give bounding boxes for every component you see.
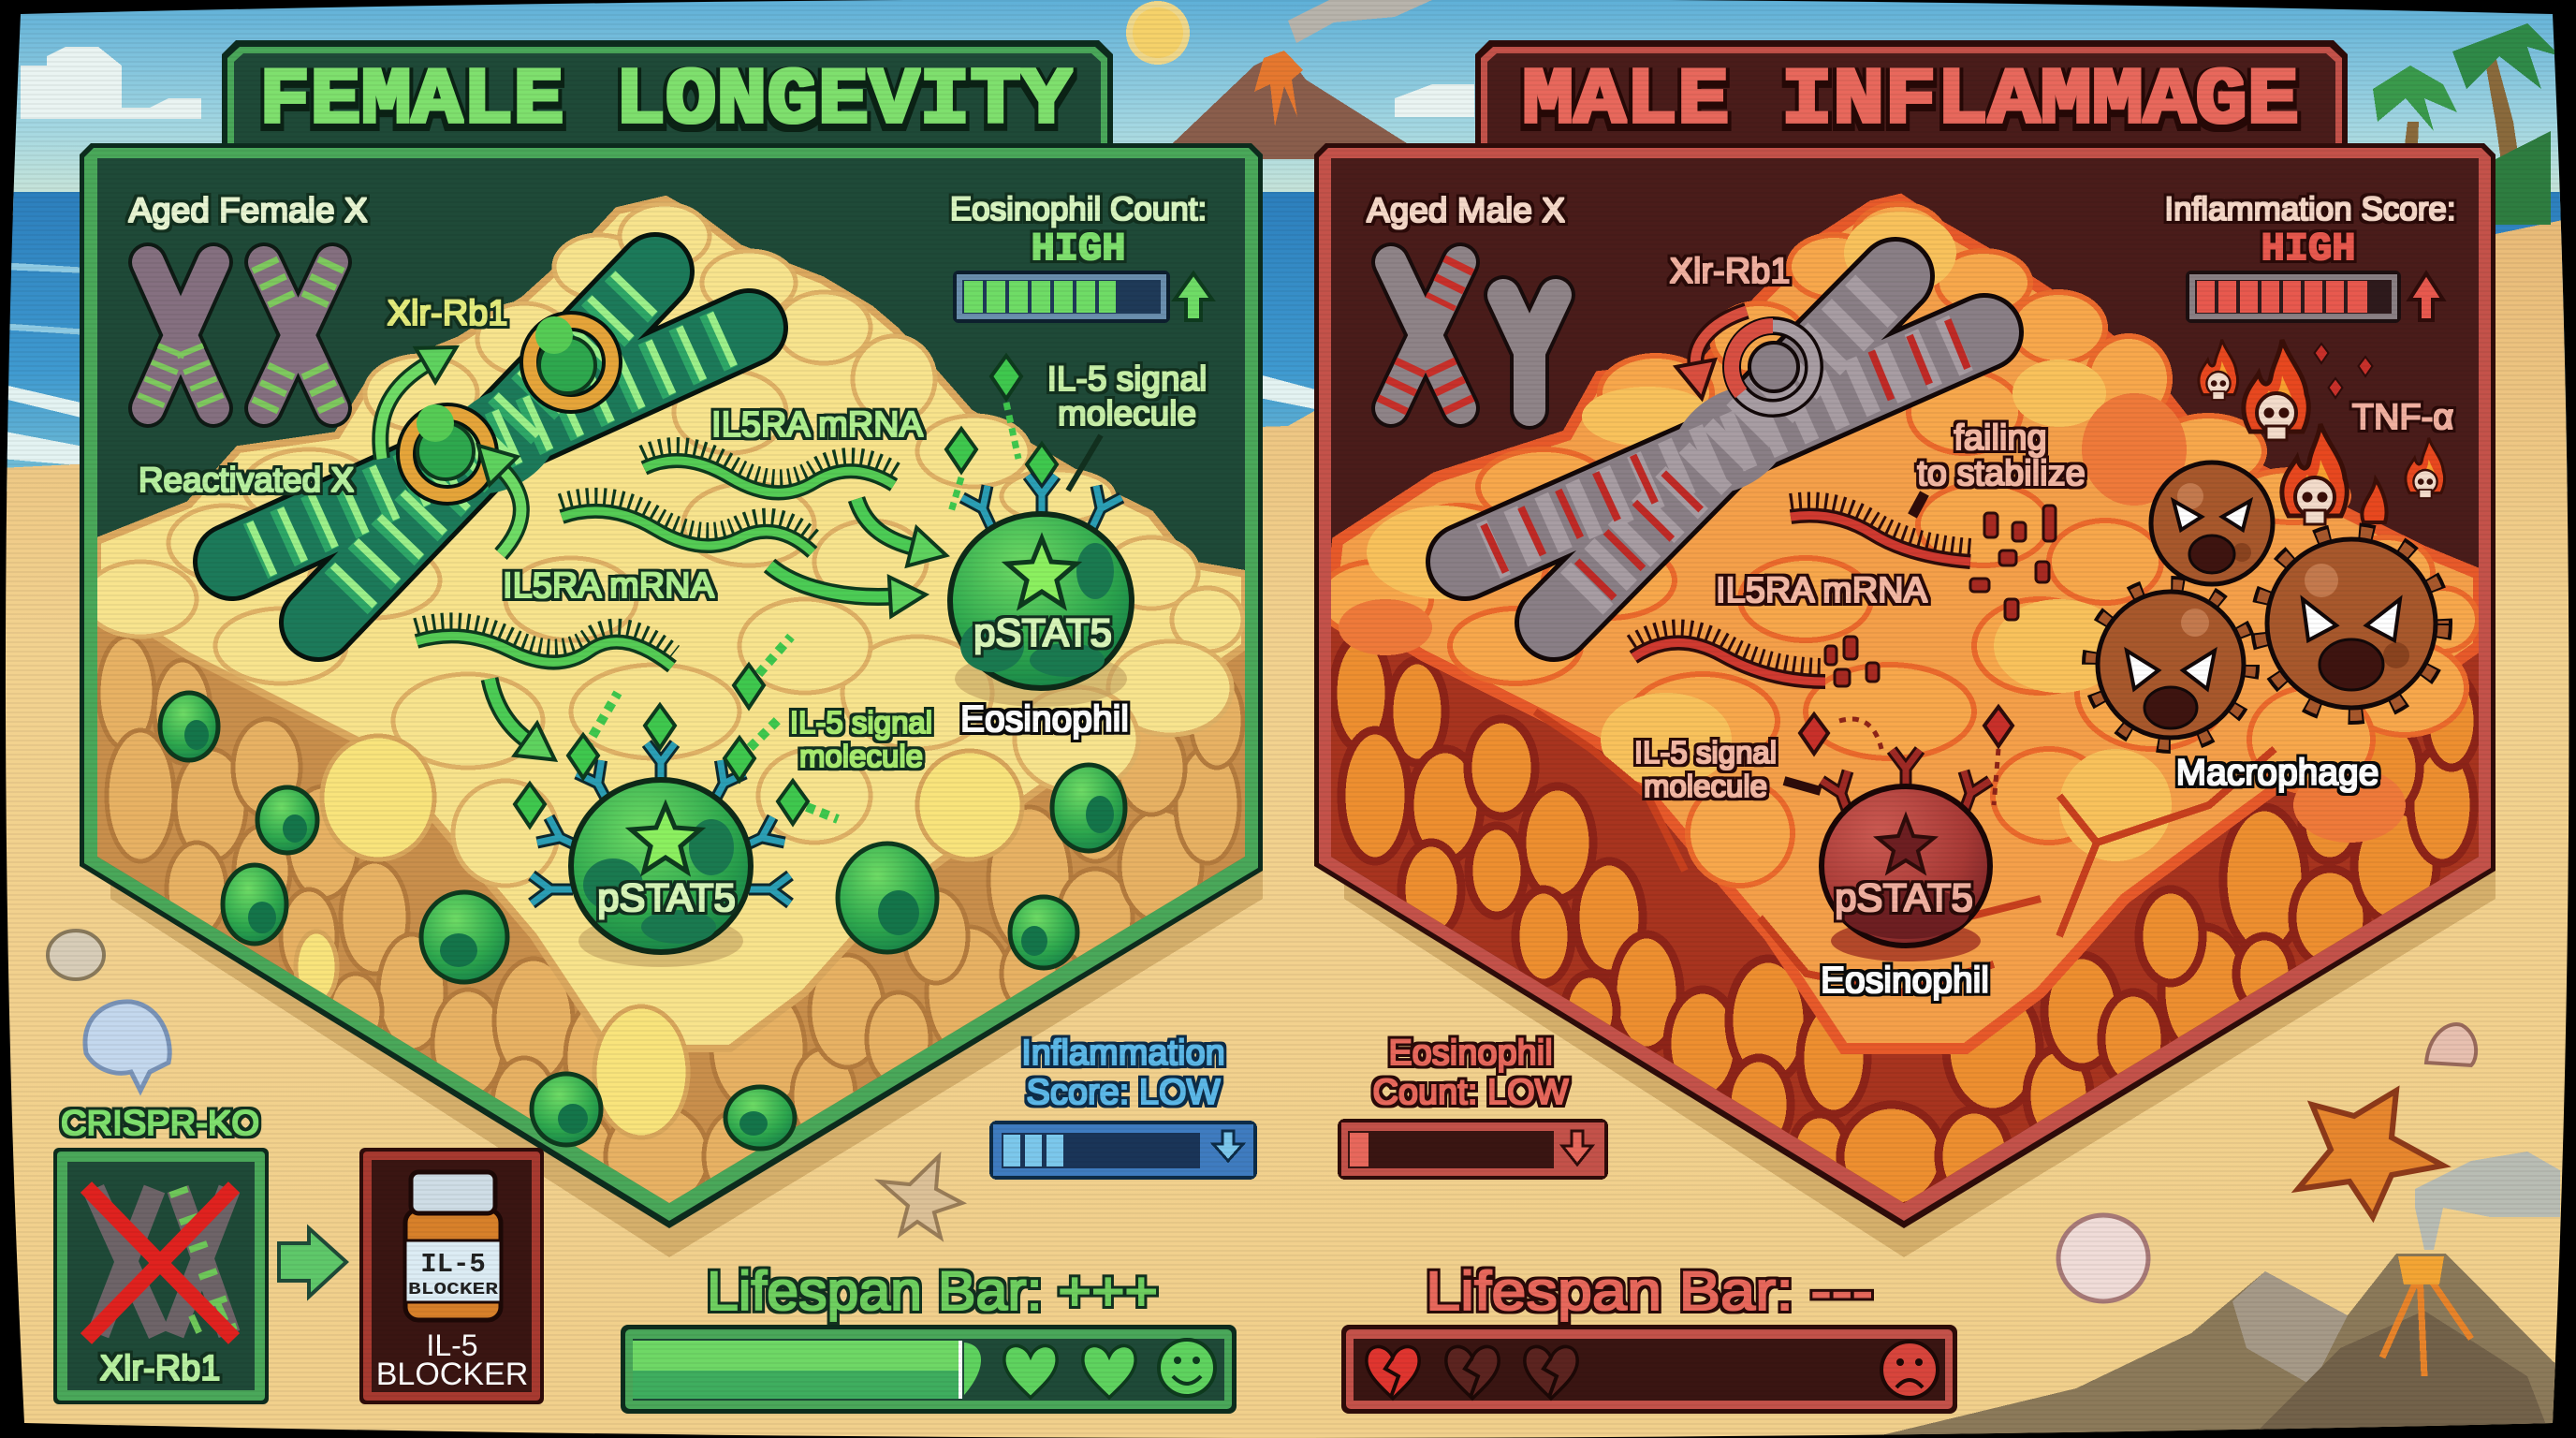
partial heart <box>964 1343 981 1395</box>
title: Male Inflammage <box>1475 40 2348 146</box>
mRNA strand degraded lower <box>1633 631 1825 682</box>
gauge: eosinophil low <box>1338 1119 1608 1180</box>
gauge label: inflammation score low: Inflammation <box>1021 1034 1225 1073</box>
label: pSTAT5 lower: pSTAT5 <box>597 875 736 919</box>
gauge label: eosinophil count low: Eosinophil <box>1388 1034 1553 1073</box>
header label: Aged Male X: Aged Male X <box>1367 191 1565 229</box>
pebble <box>48 931 104 979</box>
gauge label: eosinophil count low: Count: LOW <box>1372 1073 1569 1112</box>
macrophage large <box>2261 534 2441 713</box>
icon: aged XX chromosomes <box>148 262 332 408</box>
title: Female Longevity: FEMALE LONGEVITY <box>259 57 1073 146</box>
mRNA strand degraded upper <box>1791 504 1970 562</box>
gauge: eosinophil count high <box>953 271 1170 323</box>
label: failing to stabilize: failing <box>1954 418 2047 458</box>
star: pSTAT5 <box>1007 538 1076 606</box>
eosinophil upper <box>950 476 1132 707</box>
blue shell <box>85 1002 169 1091</box>
red patches <box>1339 393 2406 843</box>
smiley face <box>1159 1340 1215 1396</box>
tissue block: side of cells <box>97 609 1245 1217</box>
inflamed tissue block: sides <box>1331 609 2479 1217</box>
arrows: mRNA to eosinophils <box>490 499 915 741</box>
palm trees <box>2373 23 2560 225</box>
bar fill <box>633 1341 962 1399</box>
panel drop shadows <box>110 871 2496 1257</box>
broken heart dim <box>1525 1346 1577 1399</box>
heading: lifespan bar male: Lifespan Bar: --- <box>1426 1261 1873 1322</box>
label: IL-5 signal molecule lower: molecule <box>799 739 923 773</box>
mRNA fragments lower <box>1825 637 1879 686</box>
clouds <box>21 47 1474 119</box>
surface cells <box>84 204 1243 886</box>
IL-5 molecules male <box>1800 707 2012 805</box>
IL-5 signal molecules lower <box>515 637 838 827</box>
header label: Aged Female X: Aged Female X <box>128 191 368 229</box>
arrow: up red <box>2409 273 2443 320</box>
mRNA strand 1 <box>644 449 894 492</box>
highlighted cells on the front edge <box>296 736 1022 1137</box>
label: TNF-alpha: TNF-α <box>2352 398 2453 437</box>
label: HIGH male: HIGH <box>2261 227 2355 271</box>
panel: female longevity <box>80 143 1263 1228</box>
icon: bottle <box>405 1172 501 1320</box>
icon: bottle: IL-5 <box>420 1249 486 1280</box>
surface lumps <box>1319 204 2478 886</box>
arrow: up <box>1175 273 1212 320</box>
arrow: failing rotation <box>1695 311 1747 367</box>
label: CRISPR-KO: CRISPR-KO <box>61 1104 259 1142</box>
tan starfish <box>880 1156 962 1238</box>
icon: green marks <box>173 1189 229 1334</box>
label: IL-5 signal molecule: IL-5 signal <box>1047 360 1207 398</box>
label: Reactivated X: Reactivated X <box>139 461 354 499</box>
label: Xlr-Rb1: Xlr-Rb1 <box>100 1349 220 1388</box>
heading: lifespan bar female: Lifespan Bar: +++ <box>707 1261 1158 1322</box>
label: IL5RA mRNA upper: IL5RA mRNA <box>711 405 924 445</box>
cracks across the top surface <box>1535 712 2275 992</box>
callout line male <box>1784 781 1821 791</box>
mRNA strand 2 <box>562 500 812 552</box>
sun <box>1126 1 1190 65</box>
eosinophil male <box>1822 750 1990 961</box>
lifespan bar: female <box>621 1325 1237 1414</box>
lifespan bar: male <box>1341 1325 1957 1414</box>
label: eosinophil count: Eosinophil Count: <box>950 191 1207 227</box>
label: IL-5 signal molecule lower: IL-5 signal <box>790 705 932 740</box>
inflamed cells <box>1333 637 2478 1208</box>
macrophages <box>2092 462 2441 743</box>
sad face <box>1881 1342 1938 1398</box>
arrow: upward curve <box>380 363 429 459</box>
mRNA strand 3 <box>417 624 672 667</box>
star: dim pSTAT5 <box>1878 816 1934 872</box>
broken heart dim <box>1446 1346 1499 1399</box>
label: IL5RA mRNA male: IL5RA mRNA <box>1716 571 1928 610</box>
pink shell large <box>2058 1215 2148 1301</box>
pink shell small <box>2426 1024 2476 1065</box>
panel: CRISPR knockout <box>53 1148 269 1404</box>
arrow: to blocker <box>279 1228 346 1297</box>
label: Eosinophil male: Eosinophil <box>1821 961 1989 1001</box>
label: IL-5 BLOCKER: IL-5 <box>426 1328 478 1362</box>
tissue block: top surface mound <box>97 199 1245 1049</box>
arrow: lower curve <box>501 468 521 554</box>
chromosome: aged male X <box>1465 276 1984 623</box>
label: IL-5 signal molecule male: IL-5 signal <box>1634 735 1777 770</box>
centromere ring upper <box>530 316 612 404</box>
degraded centromere ring <box>1732 326 1814 408</box>
mRNA fragments upper <box>1970 506 2056 620</box>
title: Male Inflammage: MALE INFLAMMAGE <box>1522 57 2299 146</box>
TNF-alpha flaming skulls <box>2199 340 2445 524</box>
label: Macrophage: Macrophage <box>2176 753 2378 793</box>
embedded green cells <box>160 693 1125 1149</box>
inflamed tissue block: top mound <box>1331 199 2479 1049</box>
gauge label: inflammation score low: Score: LOW <box>1027 1073 1221 1112</box>
label: Eosinophil upper: Eosinophil <box>960 699 1129 740</box>
macrophage small <box>2151 462 2273 584</box>
icon: red cross <box>86 1187 234 1339</box>
label: pSTAT5 male: pSTAT5 <box>1835 875 1973 919</box>
label: IL-5 signal molecule male: molecule <box>1644 769 1767 803</box>
tissue cells <box>98 637 1243 1208</box>
label: HIGH: HIGH <box>1032 227 1125 271</box>
hearts <box>1004 1345 1135 1398</box>
label: failing to stabilize: to stabilize <box>1917 454 2086 493</box>
IL-5 signal molecules upper <box>946 356 1101 515</box>
panel: male inflammage <box>1314 143 2496 1228</box>
chromosome: reactivated X <box>232 271 749 623</box>
label: IL5RA mRNA lower: IL5RA mRNA <box>503 566 715 606</box>
gauge: inflammation high <box>2186 271 2401 323</box>
panel: IL-5 blocker <box>359 1148 544 1404</box>
label: IL-5 BLOCKER: BLOCKER <box>376 1357 528 1392</box>
icon: bottle: BLOCKER <box>408 1281 498 1299</box>
icon: knocked-out chromosomes <box>94 1189 229 1334</box>
label: IL-5 signal molecule: molecule <box>1058 394 1196 433</box>
eosinophil lower <box>532 743 790 967</box>
label: pSTAT5: pSTAT5 <box>973 610 1112 654</box>
label: Xlr-Rb1 male: Xlr-Rb1 <box>1670 252 1790 291</box>
bright lumps <box>1367 212 2172 861</box>
gauge: inflammation low <box>989 1121 1257 1180</box>
icon: aged XY chromosomes <box>1391 262 1556 410</box>
foreground mountains and smoke <box>1854 1152 2576 1438</box>
broken heart bright <box>1367 1346 1419 1399</box>
star: pSTAT5 lower <box>631 805 700 872</box>
dark patches on the green cells <box>184 720 1114 1136</box>
label: inflammation score: Inflammation Score: <box>2164 191 2456 227</box>
callout line <box>1912 493 1925 516</box>
orange starfish <box>2298 1091 2443 1217</box>
volcano in the distance <box>1156 0 1432 159</box>
centromere ring lower <box>406 404 489 495</box>
macrophage medium <box>2092 586 2249 743</box>
label: Xlr-Rb1: Xlr-Rb1 <box>388 294 507 333</box>
